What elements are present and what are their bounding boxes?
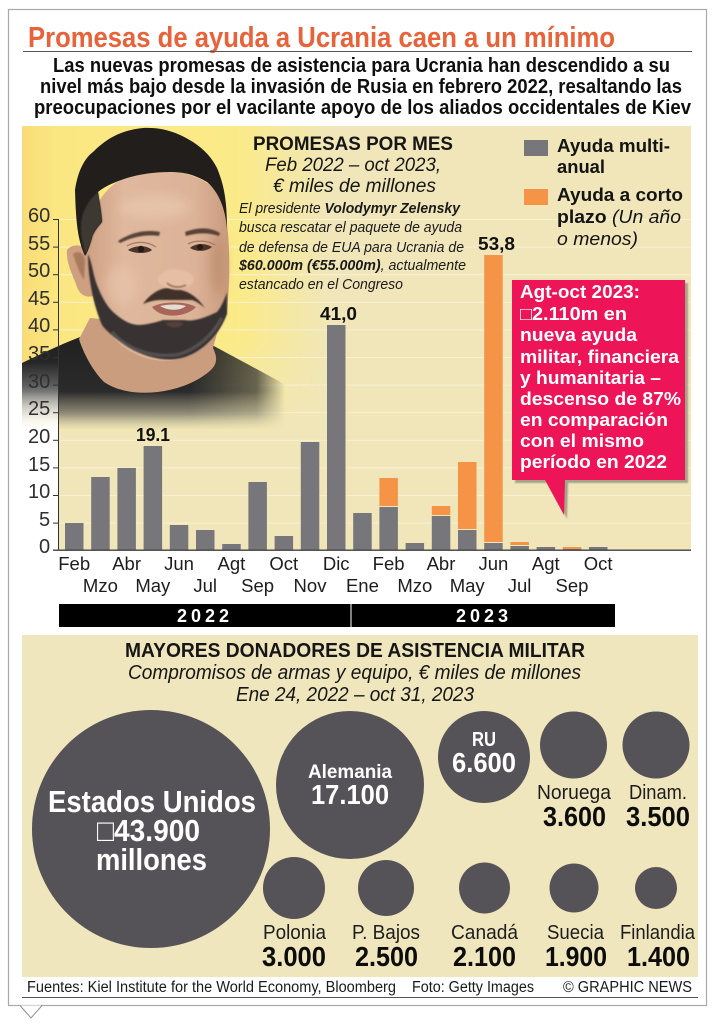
note on Zelensky: El presidente Volodymyr Zelensky: [239, 200, 461, 217]
month labels: Abr: [112, 553, 141, 574]
chart heading: Feb 2022 – oct 2023,: [265, 154, 441, 176]
neck: [79, 318, 218, 393]
y axis: 20: [28, 426, 50, 448]
donor: Países Bajos: P. Bajos: [352, 922, 420, 944]
y axis: 30: [28, 371, 50, 393]
callout: en comparación: [520, 409, 668, 430]
month labels: Feb: [58, 553, 90, 574]
donor: Finlandia: 1.400: [627, 941, 690, 972]
callout: militar, financiera: [520, 346, 680, 367]
panel: monthly pledges: [22, 126, 691, 550]
left shirt fade: [22, 362, 58, 434]
chart heading: € miles de millones: [273, 175, 436, 197]
month labels: Jul: [508, 575, 531, 596]
donor: Polonia: 3.000: [262, 941, 326, 972]
month labels: Ene: [346, 575, 379, 596]
mouth: [152, 302, 196, 316]
footer sources: Fuentes: Kiel Institute for the World Economy, Bloomberg: [27, 979, 396, 996]
month labels: Abr: [427, 553, 455, 574]
bar value labels: [136, 234, 515, 445]
legend: anual: [557, 156, 605, 177]
y axis: 10: [28, 481, 50, 503]
month labels: Oct: [584, 553, 613, 574]
month labels: Jun: [478, 553, 508, 574]
hair: [75, 128, 227, 256]
donor: RU: [438, 711, 530, 803]
note on Zelensky: [238, 200, 466, 293]
donor: Estados Unidos: Estados Unidos: [48, 784, 256, 819]
brows: [118, 231, 160, 243]
subtitle: [34, 54, 692, 119]
month labels: Agt: [532, 553, 560, 574]
month labels: Jul: [193, 575, 217, 596]
mustache: [143, 288, 205, 308]
month labels: Nov: [294, 575, 327, 596]
y axis: 0: [39, 536, 50, 558]
soul patch: [165, 322, 184, 328]
nose: [158, 269, 194, 288]
donor: Canadá: Canadá: [451, 922, 519, 944]
legend: Ayuda a corto: [557, 184, 683, 205]
donor: Polonia: [262, 857, 327, 972]
callout: y humanitaria –: [520, 367, 661, 388]
donor: Polonia: Polonia: [263, 922, 327, 944]
month labels: Sep: [241, 575, 274, 596]
note on Zelensky: $60.000m (€55.000m), actualmente: [238, 257, 466, 274]
legend: Ayuda multi-: [557, 135, 670, 156]
year band: 2022: [177, 606, 233, 626]
month labels: Mzo: [83, 575, 118, 596]
legend: o menos): [557, 228, 638, 249]
donor: Países Bajos: [352, 860, 420, 972]
donor: RU: RU: [472, 729, 496, 751]
note on Zelensky: de defensa de EUA para Ucrania de: [239, 239, 464, 256]
donor: Alemania: Alemania: [308, 762, 392, 783]
year band: 2023: [456, 606, 512, 626]
donor: Dinamarca: Dinam.: [629, 782, 687, 804]
donor: Suecia: Suecia: [547, 922, 605, 944]
callout: [512, 280, 688, 519]
donor: Finlandia: [620, 867, 696, 972]
chart heading: PROMESAS POR MES: [253, 133, 453, 155]
footer sources: © GRAPHIC NEWS: [563, 979, 692, 996]
month labels: [58, 553, 613, 596]
donors heading: MAYORES DONADORES DE ASISTENCIA MILITAR: [125, 640, 586, 662]
y axis: 5: [39, 509, 50, 531]
donors heading: [125, 640, 586, 706]
donors heading: Compromisos de armas y equipo, € miles de millones: [128, 662, 581, 684]
panel: largest military donors: [22, 635, 698, 977]
month labels: Mzo: [397, 575, 432, 596]
y axis: 55: [28, 233, 50, 255]
callout: nueva ayuda: [520, 324, 638, 345]
shirt: [22, 336, 284, 428]
callout: período en 2022: [520, 451, 667, 472]
ear: [67, 245, 93, 297]
bar value labels: 53,8: [478, 234, 515, 254]
donor: Dinamarca: 3.500: [626, 801, 690, 832]
bar chart: [53, 234, 691, 551]
year band: [59, 604, 615, 627]
y axis: 15: [28, 454, 50, 476]
frame tail: [20, 1006, 42, 1018]
y axis: [28, 205, 59, 558]
legend: [524, 135, 683, 249]
legend: plazo (Un año: [557, 206, 681, 227]
donor: Dinamarca: [622, 712, 690, 832]
month labels: May: [135, 575, 171, 596]
callout: con el mismo: [520, 430, 644, 451]
donor: Noruega: [537, 712, 612, 832]
y axis: 40: [28, 315, 50, 337]
bar value labels: 19.1: [136, 425, 170, 445]
callout: Agt-oct 2023:: [520, 281, 640, 302]
y axis: 45: [28, 288, 50, 310]
month labels: May: [450, 575, 485, 596]
footer sources: Foto: Getty Images: [412, 979, 534, 996]
donor: Suecia: [545, 864, 607, 972]
bar value labels: 41,0: [320, 304, 357, 324]
month labels: Jun: [164, 553, 194, 574]
y axis: 35: [28, 343, 50, 365]
month labels: Agt: [218, 553, 245, 574]
donors heading: Ene 24, 2022 – oct 31, 2023: [236, 684, 474, 706]
callout: □2.110m en: [520, 303, 627, 324]
month labels: Sep: [556, 575, 588, 596]
footer sources: [22, 979, 698, 998]
month labels: Oct: [269, 553, 298, 574]
callout: descenso de 87%: [520, 388, 681, 409]
donor: Países Bajos: 2.500: [355, 941, 418, 972]
donor: Noruega: Noruega: [537, 782, 612, 804]
donor: Estados Unidos: [32, 710, 270, 948]
photo: Volodymyr Zelensky: [22, 128, 300, 434]
y axis: 50: [28, 260, 50, 282]
donor: Estados Unidos: □43.900: [97, 813, 200, 848]
beard: [88, 254, 227, 359]
donor: Estados Unidos: millones: [96, 842, 207, 877]
note on Zelensky: busca rescatar el paquete de ayuda: [239, 219, 462, 236]
donor: Suecia: 1.900: [545, 941, 607, 972]
face shading: [106, 265, 138, 305]
title: Promesas de ayuda a Ucrania caen a un mínimo: [28, 22, 615, 54]
eyes: [128, 246, 152, 253]
donor: Alemania: 17.100: [311, 779, 389, 810]
donor: Canadá: [451, 862, 519, 972]
y axis: 60: [28, 205, 50, 227]
month labels: Dic: [323, 553, 350, 574]
donor: Noruega: 3.600: [543, 801, 606, 832]
note on Zelensky: estancado en el Congreso: [239, 276, 403, 293]
donor: Finlandia: Finlandia: [620, 922, 696, 944]
chart heading: [253, 133, 453, 197]
face: [88, 171, 229, 361]
donor: Canadá: 2.100: [453, 941, 516, 972]
y axis: 25: [28, 398, 50, 420]
donor: RU: 6.600: [452, 747, 516, 778]
side hair: [81, 192, 102, 254]
donor: Alemania: [276, 711, 424, 859]
beard grey highlight: [112, 318, 222, 356]
month labels: Feb: [373, 553, 405, 574]
